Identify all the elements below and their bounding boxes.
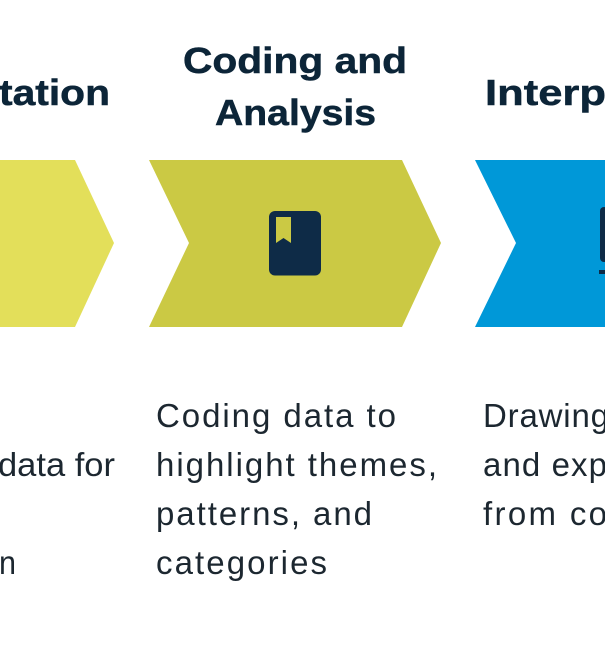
text block: coding description	[156, 397, 437, 581]
text block: annotation description	[0, 446, 115, 581]
text block: interpretation description: from co	[483, 495, 605, 532]
heading: interpretation step: Interp	[485, 72, 605, 113]
heading: coding and analysis: Coding and	[183, 40, 407, 81]
text block: interpretation description	[483, 397, 605, 532]
chevron: blue interpretation step	[475, 160, 605, 327]
text block: coding description: categories	[156, 544, 327, 581]
text block: annotation description: data for	[0, 446, 115, 483]
chevron: yellow step	[0, 160, 114, 327]
heading: coding and analysis	[183, 40, 407, 133]
heading: annotation step: tation	[0, 72, 110, 113]
text block: coding description: highlight themes,	[156, 446, 437, 483]
chevron: coding and analysis	[149, 160, 441, 327]
text block: coding description: Coding data to	[156, 397, 396, 434]
text block: coding description: patterns, and	[156, 495, 372, 532]
heading: coding and analysis: Analysis	[215, 92, 376, 133]
text block: interpretation description: and exp	[483, 446, 605, 483]
icon: bookmarked book	[269, 211, 321, 276]
icon: partially visible device	[599, 207, 605, 274]
